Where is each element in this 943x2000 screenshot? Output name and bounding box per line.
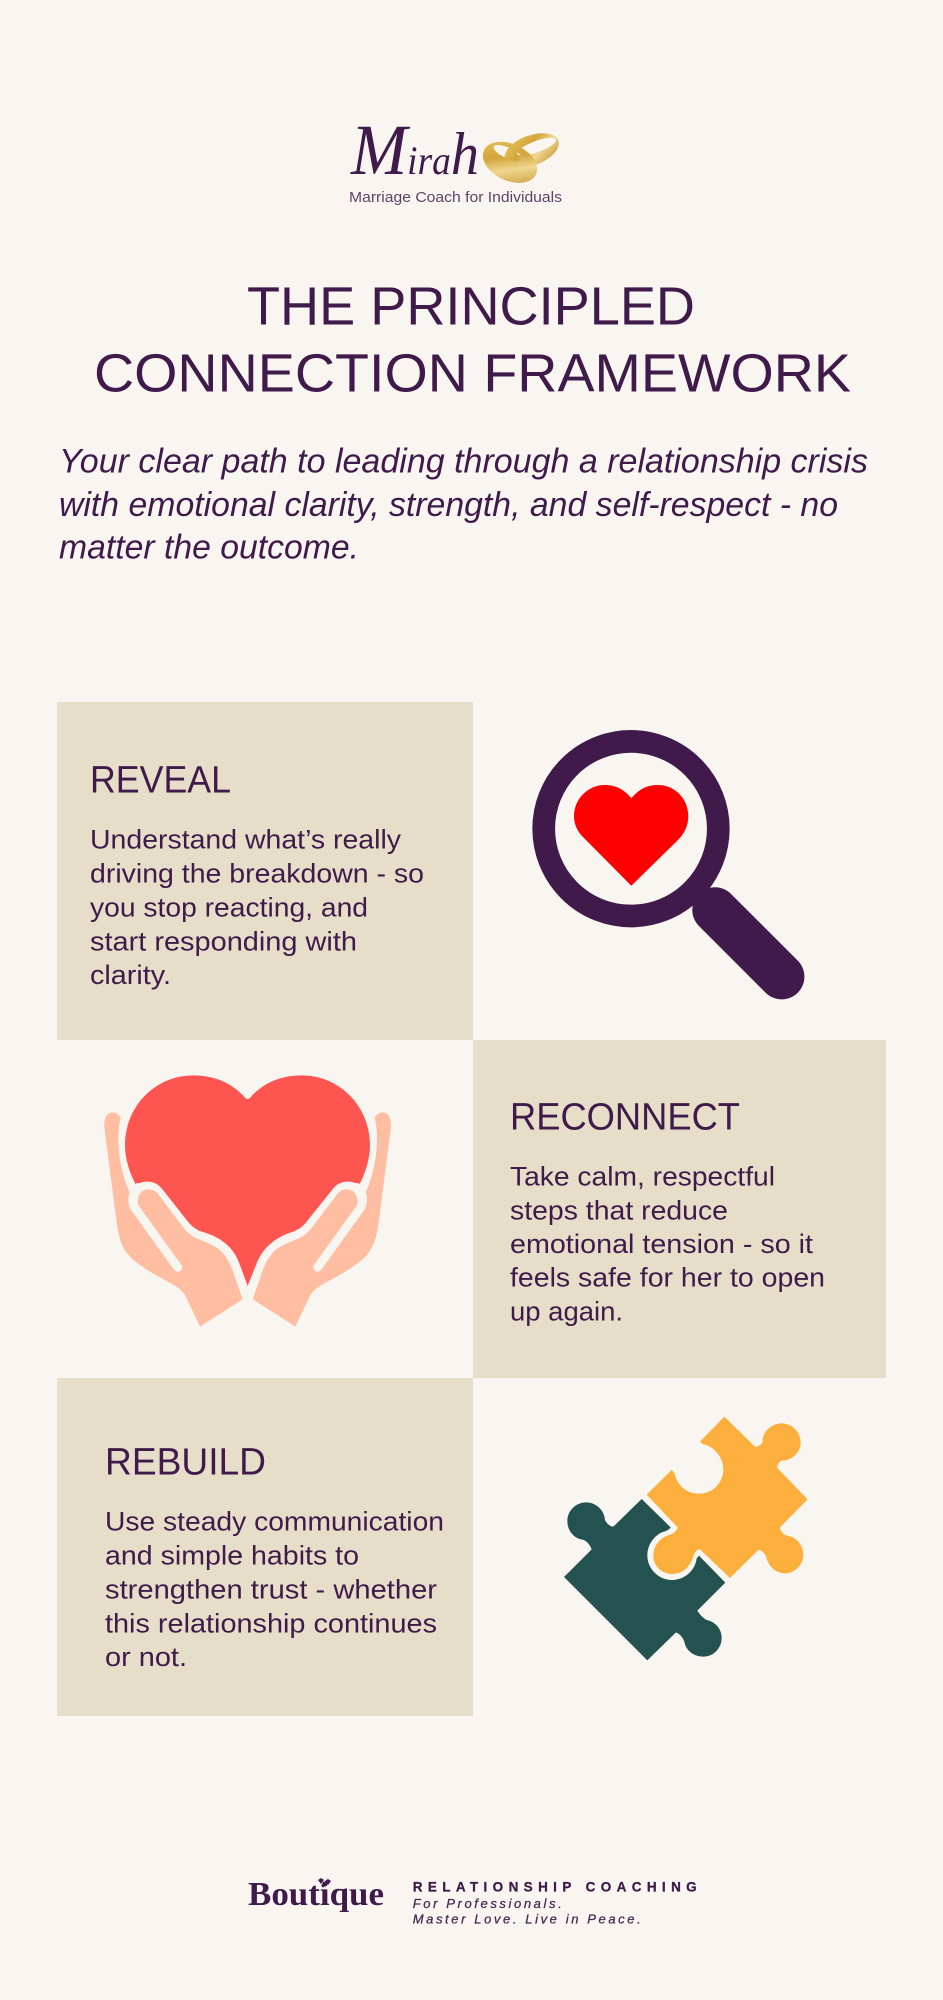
text: reconnect description: up again. [510,1297,623,1327]
text: reveal description: start responding with [90,926,357,956]
text: reconnect description: emotional tension - so it [510,1229,814,1259]
footer tagline: Master Love. Live in Peace. [413,1912,641,1927]
teal puzzle piece [564,1499,725,1660]
subtitle: matter the outcome. [59,528,359,566]
heading: reconnect: RECONNECT [510,1096,740,1138]
text: rebuild description: and simple habits to [105,1541,359,1571]
text: rebuild description: strengthen trust - whether [105,1575,437,1605]
subtitle: Your clear path to leading through a relationship crisis [59,442,868,480]
text: reconnect description: feels safe for her to open [510,1263,825,1293]
text: reconnect description [510,1162,825,1327]
title: CONNECTION FRAMEWORK [94,344,851,404]
left hand [104,1112,243,1327]
heart [125,1075,370,1286]
subtitle [59,442,868,566]
text: reveal description: clarity. [90,960,171,990]
panel: reconnect [473,1040,886,1378]
subtitle: with emotional clarity, strength, and self-respect - no [59,486,838,524]
orange puzzle piece [647,1417,808,1578]
text: rebuild description: or not. [105,1642,187,1672]
logo wordmark: Mirah [350,110,479,190]
heading: reveal: REVEAL [90,760,231,802]
text: rebuild description: this relationship continues [105,1608,437,1638]
icon: gold wedding rings [476,127,563,191]
text: reveal description [90,824,424,990]
icon: magnifying glass with heart [544,741,782,977]
logo tagline: Marriage Coach for Individuals [349,190,562,206]
panel: reveal [57,702,473,1040]
footer tagline: RELATIONSHIP COACHING [413,1880,697,1895]
panel: rebuild [57,1378,473,1716]
text: reconnect description: Take calm, respectful [510,1162,775,1192]
text: rebuild description [105,1507,444,1672]
text: reveal description: Understand what’s really [90,824,402,854]
right hand [253,1112,391,1327]
text: rebuild description: Use steady communication [105,1507,444,1537]
footer logo: Boutique: Boutique [248,1876,384,1913]
logo: Mirah [349,110,563,206]
icon: small hearts [318,1878,331,1888]
footer tagline [413,1880,697,1927]
footer tagline: For Professionals. [413,1896,562,1911]
icon: hands holding heart [104,1075,391,1327]
text: reveal description: driving the breakdown - so [90,858,424,888]
icon: puzzle pieces [564,1417,808,1660]
text: reveal description: you stop reacting, and [90,893,368,923]
title [94,276,851,404]
title: THE PRINCIPLED [247,276,695,336]
text: reconnect description: steps that reduce [510,1195,728,1225]
heading: rebuild: REBUILD [105,1442,266,1484]
